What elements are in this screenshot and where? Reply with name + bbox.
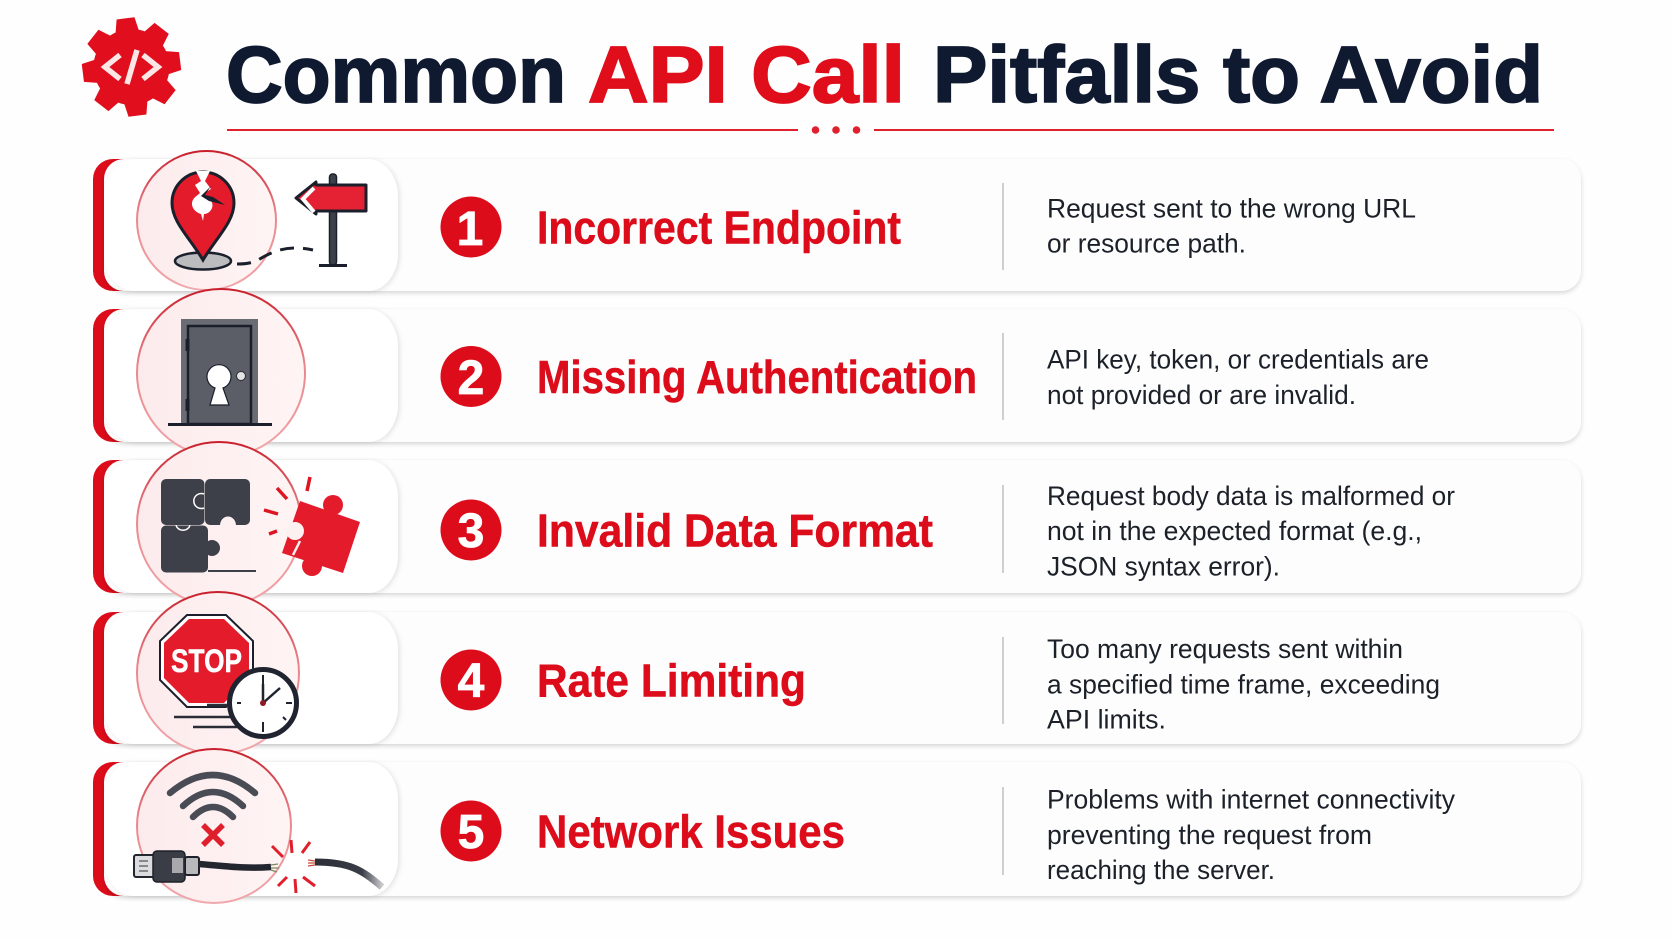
description: Too many requests sent within xyxy=(1047,634,1403,664)
icon: code gear xyxy=(81,17,182,117)
description: preventing the request from xyxy=(1047,820,1372,850)
icon: broken map pin and signpost xyxy=(137,151,366,290)
number badge 5: 5 xyxy=(458,806,484,859)
description: Request sent to the wrong URL xyxy=(1047,194,1416,224)
icon: wifi failure and broken cable xyxy=(134,749,382,903)
description: Problems with internet connectivity xyxy=(1047,784,1455,814)
heading: Invalid Data Format xyxy=(537,504,933,556)
panel: pitfall 3 xyxy=(93,442,1581,606)
number badge 1 xyxy=(440,196,502,258)
icon: puzzle with detached red piece xyxy=(137,442,360,606)
icon: stop sign and clock: STOP xyxy=(171,643,242,679)
title: Pitfalls to Avoid xyxy=(933,30,1543,119)
description: reaching the server. xyxy=(1047,855,1275,885)
icon: stop sign and clock xyxy=(137,592,299,754)
heading: Rate Limiting xyxy=(537,654,806,706)
heading: Incorrect Endpoint xyxy=(537,202,901,254)
number badge 3: 3 xyxy=(458,505,484,558)
panel: pitfall 5 xyxy=(93,749,1581,903)
description: JSON syntax error). xyxy=(1047,552,1280,582)
number badge 4 xyxy=(440,650,502,710)
icon: locked door with keyhole xyxy=(137,289,305,457)
number badge 1: 1 xyxy=(457,203,483,256)
header xyxy=(81,17,1554,134)
number badge 2: 2 xyxy=(458,352,484,405)
number badge 5 xyxy=(440,800,502,862)
heading: Network Issues xyxy=(537,806,845,858)
description: not in the expected format (e.g., xyxy=(1047,516,1422,546)
description: Request body data is malformed or xyxy=(1047,481,1455,511)
description: not provided or are invalid. xyxy=(1047,380,1356,410)
title: API Call xyxy=(588,30,905,119)
title: Common xyxy=(226,30,566,119)
heading: Missing Authentication xyxy=(537,351,977,403)
description: API limits. xyxy=(1047,704,1166,734)
description: a specified time frame, exceeding xyxy=(1047,670,1440,700)
description: or resource path. xyxy=(1047,228,1246,258)
number badge 4: 4 xyxy=(458,655,485,708)
panel: pitfall 4 xyxy=(93,592,1581,754)
number badge 3 xyxy=(440,500,502,560)
number badge 2 xyxy=(440,346,502,407)
panel: pitfall 1 xyxy=(93,151,1581,291)
description: API key, token, or credentials are xyxy=(1047,344,1429,374)
panel: pitfall 2 xyxy=(93,289,1581,457)
